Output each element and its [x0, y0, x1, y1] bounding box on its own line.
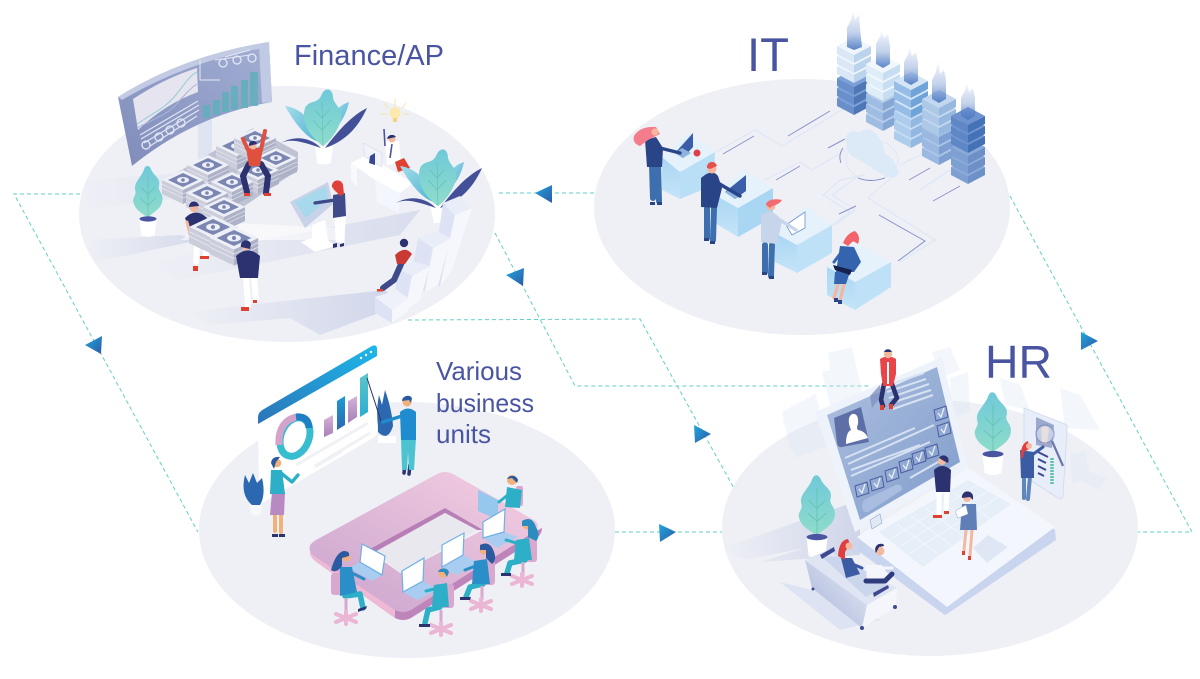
- office desk with man: [351, 129, 413, 213]
- desk 3 with person: [761, 199, 832, 279]
- money carried: [189, 216, 258, 266]
- presenter: [367, 378, 416, 474]
- plant: small left: [133, 166, 163, 237]
- heading: Finance/AP: Finance/AP: [294, 40, 444, 72]
- circuit lines: [716, 108, 960, 262]
- plant: left of sofa: [799, 475, 835, 558]
- wall monitor: [118, 42, 272, 166]
- sofa with people: [805, 539, 897, 630]
- panel: Finance/AP: [78, 40, 495, 342]
- panel: Various business units: [199, 345, 615, 658]
- bar steps: [375, 196, 472, 323]
- arrow: right path: [1081, 332, 1098, 350]
- HR backdrop ellipse: [722, 400, 1138, 656]
- light bulb: [381, 99, 409, 122]
- heading: Various business units: units: [436, 419, 491, 449]
- heading: Various business units: Various: [436, 356, 522, 386]
- floor shadows: [757, 505, 880, 630]
- kiosk with woman: [290, 180, 346, 252]
- IT backdrop ellipse: [594, 79, 1010, 335]
- browser window: [258, 345, 377, 503]
- server rack 2: [866, 30, 900, 131]
- seated person far right: [501, 519, 538, 586]
- seated person: [377, 239, 412, 292]
- seated person centre: [419, 568, 454, 635]
- desk 2 with person: [701, 162, 773, 244]
- panel: IT: [594, 10, 1010, 335]
- business backdrop ellipse: [199, 402, 615, 658]
- floor shadows: [121, 165, 420, 335]
- finance backdrop ellipse: [79, 86, 495, 342]
- cloud: [840, 129, 898, 180]
- red man on top of laptop: [880, 349, 897, 410]
- laptops on table: [349, 509, 518, 600]
- standing man on keyboard: [933, 455, 951, 518]
- bar chart: [324, 373, 368, 437]
- arrow: business units to HR: [659, 524, 676, 542]
- woman with megaphone: [955, 491, 977, 560]
- man carrying money left: [185, 201, 209, 271]
- heading: Various business units: business: [436, 388, 534, 418]
- woman at browser: [270, 457, 298, 537]
- plant: right of laptop: [975, 392, 1011, 475]
- top seated person: [478, 475, 523, 520]
- plant: large right: [396, 149, 482, 223]
- arrow: IT to Finance: [535, 185, 552, 203]
- resume phone with woman: [1020, 408, 1067, 499]
- server rack 1: [837, 10, 871, 115]
- heading: HR: HR: [985, 336, 1052, 388]
- plant: large centre: [281, 89, 367, 164]
- floating translucent squares: [782, 347, 1107, 490]
- server rack 5: [951, 82, 985, 184]
- heading: Various business units: [436, 356, 534, 449]
- server rack 3: [894, 46, 928, 148]
- money pile: [162, 128, 298, 231]
- red man on money: [243, 131, 271, 196]
- seated person right: [460, 544, 495, 611]
- seated person left: [331, 551, 367, 624]
- man carrying money right: [236, 240, 260, 311]
- heading: IT: IT: [747, 28, 789, 81]
- panel: HR: [722, 336, 1138, 656]
- server rack 4: [922, 60, 956, 165]
- arrow: toward HR diagonal: [694, 425, 711, 443]
- connector lines: [14, 193, 1192, 532]
- desk 1 with person: [634, 127, 715, 205]
- conference table: [309, 472, 542, 620]
- arrow: toward Finance: [506, 268, 524, 286]
- desk 4 with person: [827, 231, 891, 310]
- plant: behind presenter: [377, 390, 396, 443]
- arrow: left path up: [85, 336, 102, 354]
- laptop: [815, 357, 1056, 615]
- donut chart: [275, 413, 315, 461]
- plant: left of browser: [244, 473, 264, 516]
